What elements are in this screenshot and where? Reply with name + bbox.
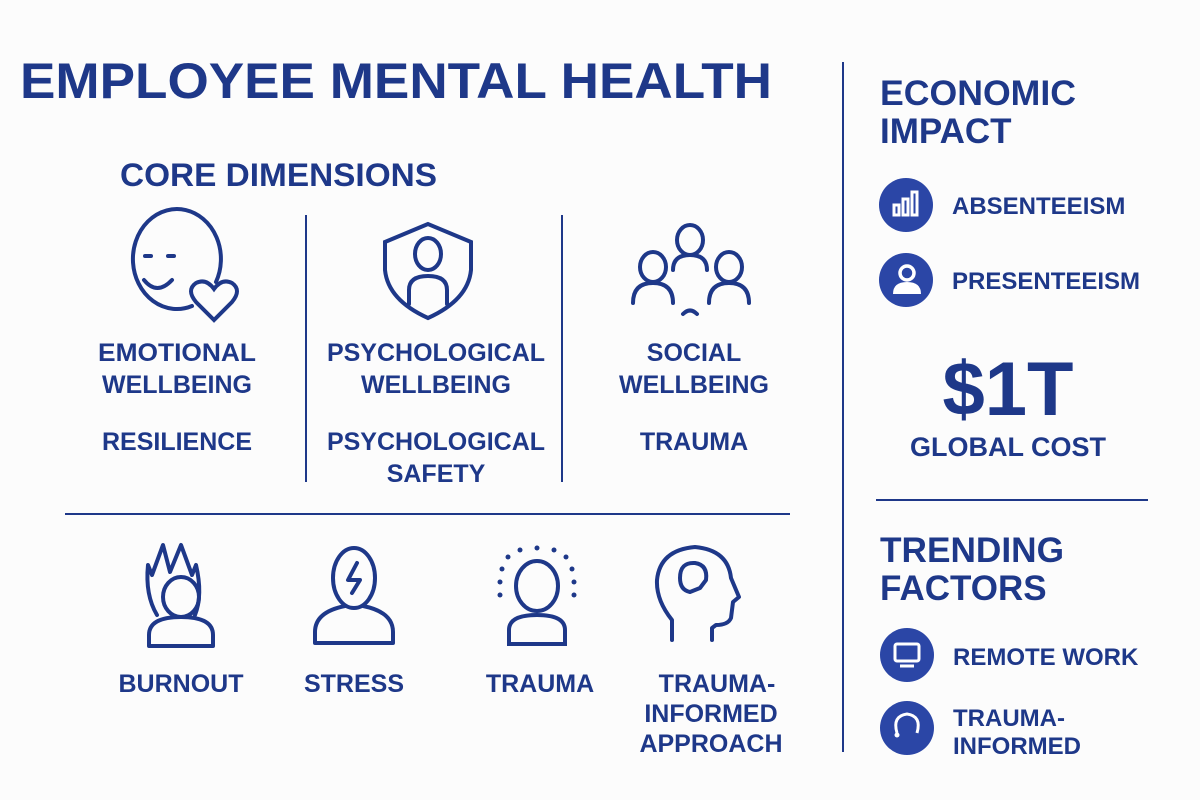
heading: trending factors: FACTORS — [880, 569, 1047, 608]
label: BURNOUT — [118, 670, 244, 698]
label: PSYCHOLOGICAL — [327, 339, 545, 367]
item: trauma-informed approach: INFORMED — [644, 700, 778, 728]
heading: economic impact: IMPACT — [880, 112, 1012, 151]
panel: emotional wellbeing — [98, 209, 256, 456]
icon: headset circle — [880, 701, 934, 755]
icon: group of people — [633, 225, 749, 314]
title: EMPLOYEE MENTAL HEALTH — [20, 53, 772, 109]
label: STRESS — [304, 670, 404, 698]
item: absenteeism — [879, 178, 1125, 232]
heading: core dimensions: CORE DIMENSIONS — [120, 157, 437, 193]
panel: psychological wellbeing — [327, 224, 545, 488]
panel: psychological wellbeing: PSYCHOLOGICAL — [327, 428, 545, 456]
panel: social wellbeing: TRAUMA — [640, 428, 748, 456]
icon: shield with person — [385, 224, 471, 318]
item: trauma-informed: TRAUMA- — [953, 705, 1065, 732]
item: trauma-informed approach: APPROACH — [639, 730, 783, 758]
stat: $1T global cost: GLOBAL COST — [910, 432, 1106, 462]
panel: emotional wellbeing: RESILIENCE — [102, 428, 252, 456]
icon: person with dotted aura — [509, 561, 565, 644]
item: trauma — [486, 546, 594, 698]
panel: social wellbeing: WELLBEING — [619, 371, 769, 399]
label: EMOTIONAL — [98, 339, 256, 367]
heading: trending factors — [880, 531, 1064, 608]
label: TRAUMA- — [659, 670, 775, 698]
item: presenteeism: PRESENTEEISM — [952, 268, 1140, 295]
item: trauma-informed approach — [639, 547, 783, 758]
stat: $1T global cost: $1T — [943, 347, 1073, 432]
item: stress — [304, 548, 404, 698]
icon: burnout person with flame — [147, 545, 213, 646]
item: absenteeism: ABSENTEEISM — [952, 193, 1125, 220]
item: trauma-informed — [880, 701, 1081, 760]
heading: economic impact: ECONOMIC — [880, 74, 1076, 113]
icon: bar chart circle — [879, 178, 933, 232]
item: remote work — [880, 628, 1139, 682]
icon: person circle — [879, 253, 933, 307]
label: TRAUMA — [486, 670, 594, 698]
icon: person with lightning — [315, 548, 393, 643]
stat: $1T global cost — [910, 347, 1106, 462]
heading: economic impact — [880, 74, 1076, 151]
item: burnout — [118, 545, 244, 698]
icon: monitor circle — [880, 628, 934, 682]
panel: social wellbeing — [619, 225, 769, 456]
panel: psychological wellbeing: WELLBEING — [361, 371, 511, 399]
item: remote work: REMOTE WORK — [953, 644, 1139, 671]
item: trauma-informed: INFORMED — [953, 733, 1081, 760]
item: presenteeism — [879, 253, 1140, 307]
panel: emotional wellbeing: WELLBEING — [102, 371, 252, 399]
icon: head with brain — [657, 547, 739, 640]
heading: trending factors: TRENDING — [880, 531, 1064, 570]
panel: psychological wellbeing: SAFETY — [387, 460, 486, 488]
icon: smiley with heart — [133, 209, 237, 320]
label: SOCIAL — [647, 339, 741, 367]
